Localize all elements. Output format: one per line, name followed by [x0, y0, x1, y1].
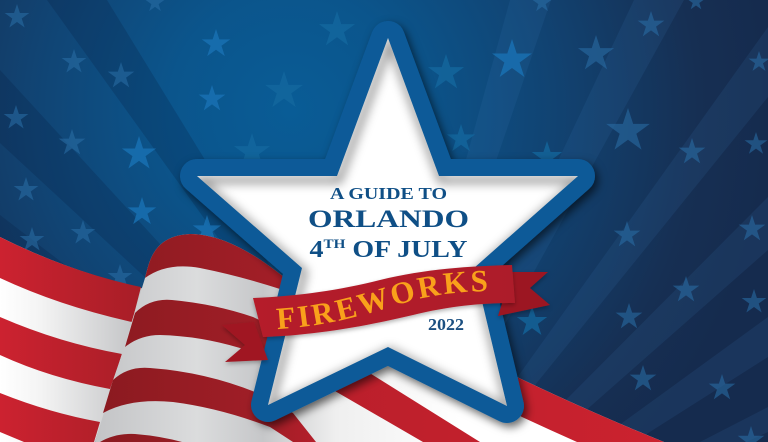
line: 4th of july: OF JULY [345, 237, 468, 263]
star white fill [197, 38, 578, 406]
white star with blue border [197, 38, 578, 406]
line: a guide to: A GUIDE TO [330, 184, 447, 203]
back flag panel, left [0, 237, 145, 442]
line: orlando: ORLANDO [308, 206, 469, 233]
inner shadow of star [199, 42, 580, 410]
ribbon [222, 265, 550, 366]
line: 4th of july: 4 [310, 237, 322, 263]
waving flag [0, 234, 664, 442]
ribbon main band [253, 265, 515, 337]
ribbon left tail [222, 322, 268, 362]
heading [308, 184, 469, 263]
ribbon right tail [498, 272, 550, 316]
star blue outline [197, 38, 578, 406]
ribbon text: FIREWORKS [276, 270, 487, 330]
front fold and lower right cloth [95, 234, 664, 442]
year: 2022 [428, 315, 464, 334]
line: 4th of july: TH [323, 236, 345, 251]
